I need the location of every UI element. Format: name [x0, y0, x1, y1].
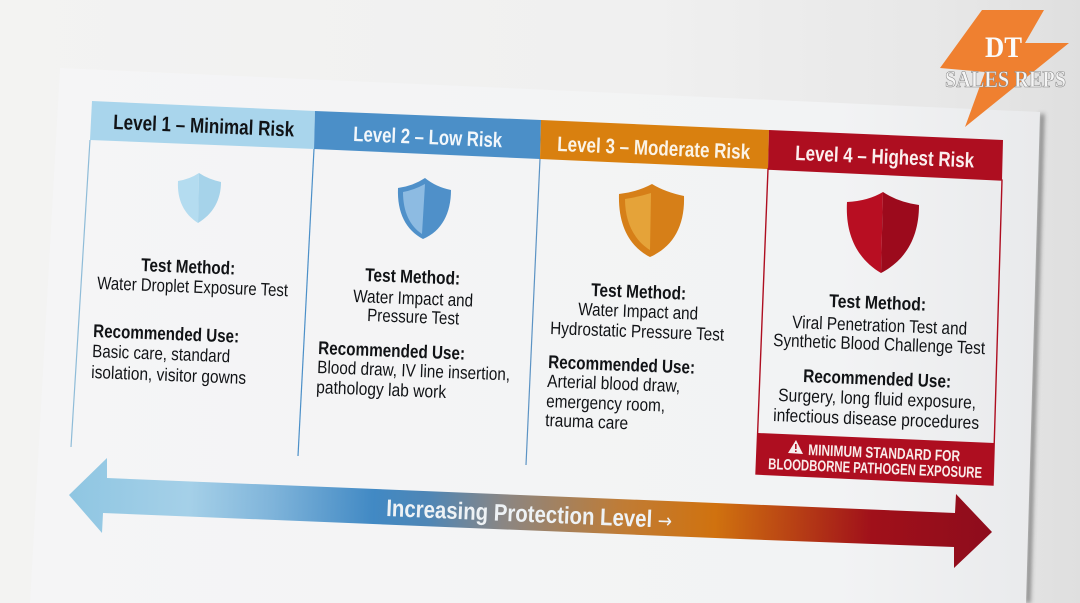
icon: blue shield: [398, 178, 451, 239]
level 4 header: [768, 130, 1003, 180]
level 1 test method: Water Droplet Exposure Test: [97, 273, 288, 300]
level 3 test method: Test Method:: [591, 279, 687, 304]
warning band: MINIMUM STANDARD FOR: [808, 442, 960, 465]
level 1 test method: [97, 254, 288, 300]
panel: level 3: [526, 120, 769, 465]
icon: orange shield: [619, 184, 684, 257]
warning band: [756, 433, 994, 485]
level 2 header: [314, 111, 541, 159]
level 4 recommended use: infectious disease procedures: [773, 405, 979, 433]
level 3 test method: Water Impact and: [578, 299, 699, 324]
level 4 header: Level 4 – Highest Risk: [795, 142, 975, 173]
level 4 recommended use: Recommended Use:: [803, 365, 952, 392]
level 4 recommended use: [773, 365, 979, 433]
icon: red shield: [847, 192, 919, 273]
level 2 test method: Test Method:: [365, 264, 461, 289]
level 3 recommended use: Arterial blood draw,: [547, 371, 681, 396]
level 2 test method: Water Impact and: [353, 286, 474, 311]
level 2 recommended use: Recommended Use:: [318, 337, 466, 364]
level 2 recommended use: Blood draw, IV line insertion,: [317, 357, 510, 384]
warning band: BLOODBORNE PATHOGEN EXPOSURE: [768, 456, 982, 482]
panel: level 1: [71, 101, 315, 447]
level 3 test method: Hydrostatic Pressure Test: [550, 318, 724, 345]
level 3 recommended use: trauma care: [545, 410, 629, 433]
level 2 recommended use: [316, 337, 510, 402]
level 4 test method: Test Method:: [829, 290, 927, 315]
logo: DT Sales Reps lightning bolt: [940, 10, 1069, 127]
increasing protection arrow: [69, 458, 992, 568]
arrow label: Increasing Protection Level →: [386, 495, 673, 534]
level 1 recommended use: isolation, visitor gowns: [91, 362, 246, 388]
level 1 recommended use: Recommended Use:: [93, 320, 240, 347]
level 3 recommended use: [545, 351, 696, 433]
level 1 header: Level 1 – Minimal Risk: [113, 111, 295, 142]
logo text DT: DT: [985, 31, 1022, 64]
level 4 test method: Synthetic Blood Challenge Test: [773, 330, 985, 358]
level 1 recommended use: [91, 320, 246, 388]
level 4 recommended use: Surgery, long fluid exposure,: [778, 385, 976, 413]
level 1 test method: Test Method:: [141, 254, 236, 279]
panel: level 2: [298, 111, 541, 456]
level 4 test method: [773, 290, 985, 358]
icon: warning triangle: [788, 440, 803, 454]
level 3 recommended use: Recommended Use:: [548, 351, 696, 378]
level 4 test method: Viral Penetration Test and: [792, 312, 967, 339]
level 2 header: Level 2 – Low Risk: [353, 123, 503, 152]
level 1 recommended use: Basic care, standard: [92, 341, 231, 366]
level 3 recommended use: emergency room,: [546, 391, 666, 416]
icon: light blue shield: [178, 173, 221, 223]
level 3 test method: [550, 279, 724, 345]
level 3 header: Level 3 – Moderate Risk: [557, 133, 751, 164]
level 3 header: [540, 120, 769, 169]
level 1 header: [90, 101, 315, 149]
level 2 recommended use: pathology lab work: [316, 377, 447, 402]
level 2 test method: [353, 264, 474, 329]
level 2 test method: Pressure Test: [367, 305, 460, 329]
panel: level 4: [756, 130, 1003, 485]
logo text SALES REPS: SALES REPS: [945, 67, 1066, 92]
